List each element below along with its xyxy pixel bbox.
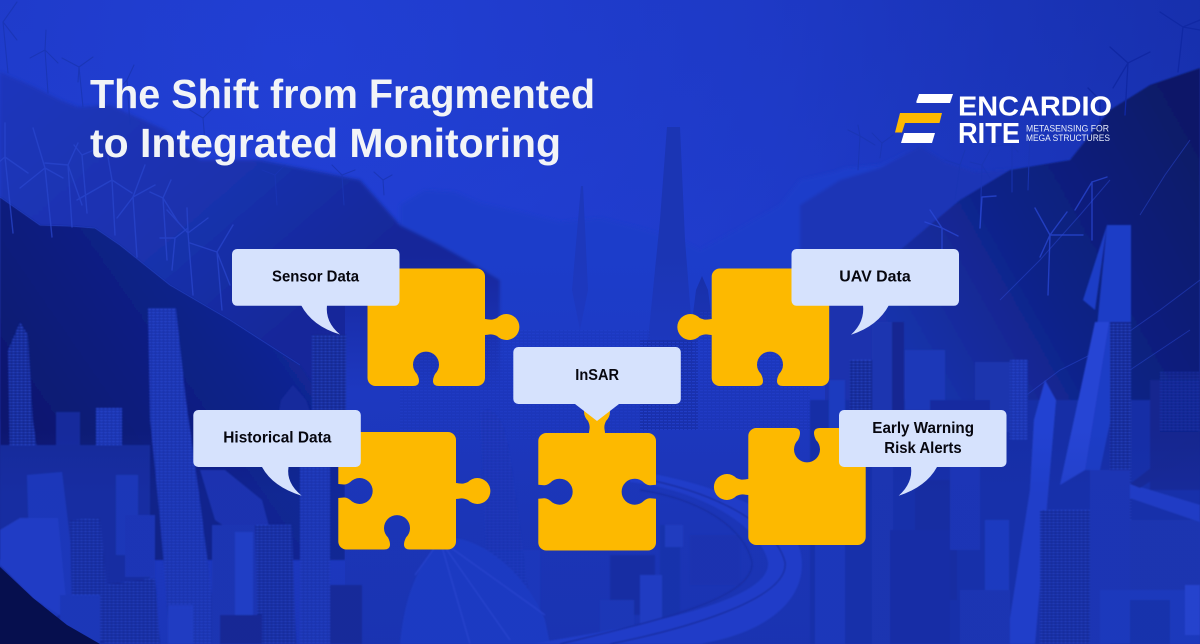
central towers [572,127,712,420]
puzzle piece: historical data [338,432,490,550]
puzzle piece: sensor data [368,268,519,386]
callout: UAV Data [792,249,959,335]
callout: InSAR: InSAR [575,367,619,384]
wind turbines [0,123,233,310]
logo wordmark: METASENSING FOR [1026,124,1109,134]
logo: Encardio Rite [895,90,1112,150]
dark right mountain [790,68,1200,520]
dark left mountain [0,197,345,560]
callout: Historical Data [193,410,361,496]
logo wordmark: RITE [958,118,1020,150]
centre bridge and highway [400,410,802,644]
callout: Early Warning Risk Alerts: Risk Alerts [884,440,962,457]
logo wordmark: MEGA STRUCTURES [1026,133,1110,143]
far mountains [0,72,1200,420]
title: to Integrated Monitoring [90,120,561,166]
callout: Historical Data: Historical Data [223,429,331,446]
title [90,71,595,166]
title: The Shift from Fragmented [90,71,595,117]
callout: InSAR [513,347,681,421]
mountain contour strokes [0,140,1200,490]
logo mark [895,94,953,143]
puzzle piece: UAV data [677,268,829,386]
callout: Early Warning Risk Alerts [839,410,1006,496]
city haze veil [0,430,1200,644]
callout: Sensor Data [232,249,400,334]
puzzle piece: early warning [714,428,866,545]
left skyline [0,308,362,644]
lower city base [345,255,825,644]
dark foreground corner [0,567,100,644]
puzzle piece: InSAR [538,399,656,550]
callout: UAV Data: UAV Data [839,269,911,286]
callout: Early Warning Risk Alerts: Early Warning [872,420,974,437]
right skyline [810,225,1200,644]
logo wordmark: ENCARDIO [958,90,1112,122]
logo wordmark [958,90,1112,150]
callout: Sensor Data: Sensor Data [272,269,359,286]
